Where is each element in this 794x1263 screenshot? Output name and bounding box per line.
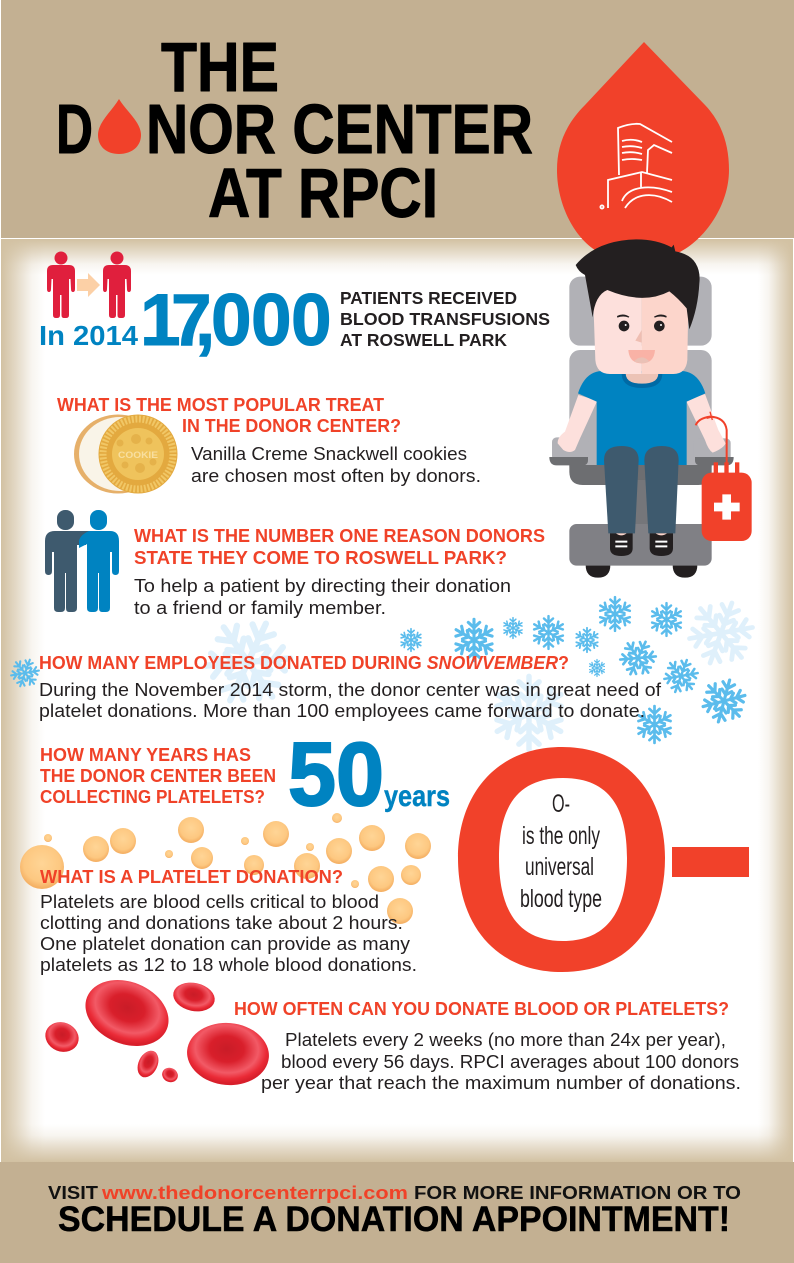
icon: large blood drop with building <box>557 42 729 260</box>
panel: white content area with tan edge fade <box>0 239 794 1162</box>
graphic: O- blood type: blood type <box>520 885 602 913</box>
graphic: O- blood type: universal <box>525 853 594 881</box>
title: D <box>56 90 93 168</box>
stat: 50 years: 50 <box>288 725 384 825</box>
panel: header band <box>0 0 794 239</box>
panel: footer <box>0 1162 794 1263</box>
stat: 17,000 patients: In 2014 <box>39 320 138 351</box>
text: popular treat answer: Vanilla Creme Snackwell cookies <box>191 443 467 464</box>
text: how often <box>234 998 741 1093</box>
text: how often: per year that reach the maximum number of donations. <box>261 1072 741 1093</box>
text: popular treat answer: are chosen most often by donors. <box>191 465 481 486</box>
text: how often: blood every 56 days. RPCI averages about 100 donors <box>281 1051 739 1072</box>
snowflakes <box>7 592 762 750</box>
red blood cells <box>41 968 272 1088</box>
heading: years collecting: HOW MANY YEARS HAS <box>40 744 251 765</box>
stat: 17,000 patients: 17,000 <box>140 280 332 361</box>
heading: years collecting: COLLECTING PLATELETS? <box>40 786 265 807</box>
footer call to action <box>48 1182 741 1239</box>
heading: popular treat <box>57 394 401 436</box>
text: number one reason: To help a patient by directing their donation <box>134 575 511 596</box>
heading: popular treat: WHAT IS THE MOST POPULAR TREAT <box>57 394 385 415</box>
text: Snowvember: HOW MANY EMPLOYEES DONATED DURING SNOWVEMBER? <box>39 652 569 673</box>
graphic: O- blood type <box>458 747 749 972</box>
title: AT RPCI <box>208 154 438 232</box>
text: what is a platelet donation <box>40 866 417 975</box>
stat: 50 years <box>288 725 450 825</box>
text: Snowvember <box>39 652 662 721</box>
graphic: O- blood type: O- <box>552 790 570 818</box>
platelets <box>20 813 431 924</box>
head <box>593 287 688 374</box>
text: what is a platelet donation: WHAT IS A PLATELET DONATION? <box>40 866 343 887</box>
stat: 50 years: years <box>384 780 450 813</box>
icon: patient to patient figures <box>47 252 131 318</box>
footer call to action: SCHEDULE A DONATION APPOINTMENT! <box>58 1200 730 1239</box>
icon: cookies: COOKIE <box>118 450 158 460</box>
icon: two people <box>45 510 119 612</box>
footer call to action: www.thedonorcenterrpci.com <box>101 1182 408 1203</box>
text: number one reason <box>134 525 545 618</box>
text: what is a platelet donation: Platelets are blood cells critical to blood <box>40 891 379 912</box>
text: number one reason: WHAT IS THE NUMBER ONE REASON DONORS <box>134 525 545 546</box>
shoes <box>610 533 673 556</box>
text: what is a platelet donation: One platelet donation can provide as many <box>40 933 411 954</box>
illustration: donor in chair <box>549 239 752 578</box>
text: how often: HOW OFTEN CAN YOU DONATE BLOOD OR PLATELETS? <box>234 998 729 1019</box>
stat: 17,000 patients <box>39 280 550 361</box>
icon: title drop <box>98 99 141 154</box>
legs <box>604 446 679 533</box>
title: NOR CENTER <box>146 90 533 168</box>
title <box>56 28 533 232</box>
arms <box>558 394 726 453</box>
heading: years collecting: THE DONOR CENTER BEEN <box>40 765 276 786</box>
text: how often: Platelets every 2 weeks (no more than 24x per year), <box>285 1029 726 1050</box>
text: what is a platelet donation: platelets as 12 to 18 whole blood donations. <box>40 954 417 975</box>
footer call to action: FOR MORE INFORMATION OR TO <box>414 1182 741 1203</box>
blood bag and tube <box>696 412 752 541</box>
shirt <box>578 371 705 465</box>
text: Snowvember: During the November 2014 storm, the donor center was in great need of <box>39 679 662 700</box>
heading: years collecting <box>40 744 276 807</box>
footer call to action: VISIT <box>48 1182 99 1203</box>
heading: popular treat: IN THE DONOR CENTER? <box>182 415 401 436</box>
text: Snowvember: platelet donations. More than 100 employees came forward to donate. <box>39 700 645 721</box>
stat: 17,000 patients: BLOOD TRANSFUSIONS <box>340 309 550 329</box>
stat: 17,000 patients: AT ROSWELL PARK <box>340 330 507 350</box>
chair <box>549 277 734 578</box>
icon: cookies <box>74 414 178 494</box>
text: what is a platelet donation: clotting and donations take about 2 hours. <box>40 912 403 933</box>
text: number one reason: to a friend or family member. <box>134 597 386 618</box>
stat: 17,000 patients: PATIENTS RECEIVED <box>340 288 517 308</box>
title: THE <box>161 28 279 106</box>
text: number one reason: STATE THEY COME TO ROSWELL PARK? <box>134 547 507 568</box>
text: popular treat answer <box>191 443 481 486</box>
collar <box>622 373 662 388</box>
graphic: O- blood type: is the only <box>522 822 600 850</box>
hair <box>576 239 700 329</box>
